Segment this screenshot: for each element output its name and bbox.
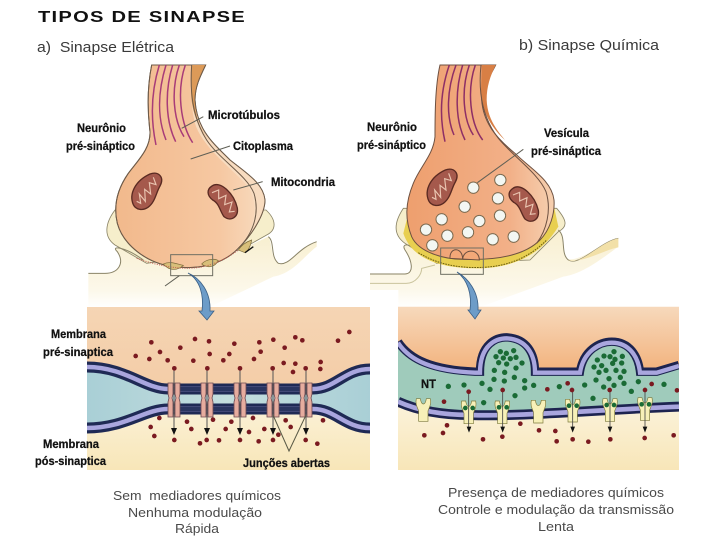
caption: chemical synapse: Presença de mediadores químicos xyxy=(448,485,665,500)
intercellular space xyxy=(87,372,370,422)
caption: electrical synapse xyxy=(113,488,282,536)
labels: electrical synapse: Membrana xyxy=(43,437,99,451)
title: TIPOS DE SINAPSE xyxy=(38,9,246,26)
yellow cleft band xyxy=(403,207,558,268)
labels: chemical synapse: pré-sináptico xyxy=(357,138,426,152)
panel: electrical synapse detail xyxy=(87,307,370,470)
caption: electrical synapse: Sem mediadores químicos xyxy=(113,488,282,503)
microtubules xyxy=(442,65,483,142)
zoom box xyxy=(441,248,483,274)
zoom box xyxy=(171,255,213,276)
ions xyxy=(133,330,352,446)
labels: electrical synapse: Junções abertas xyxy=(243,456,330,470)
presynaptic neuron xyxy=(407,65,554,259)
mitochondria xyxy=(427,169,457,205)
labels: electrical synapse: Mitocondria xyxy=(271,175,335,189)
panel: electrical synapse overview xyxy=(88,65,317,308)
arrow: chemical zoom xyxy=(457,272,481,319)
leader lines xyxy=(165,117,263,286)
flow arrows xyxy=(171,368,309,435)
labels: electrical synapse: pré-sinaptica xyxy=(43,345,113,359)
synaptic cleft xyxy=(398,342,679,410)
receptor arrows xyxy=(467,390,647,433)
panel: chemical synapse overview xyxy=(370,65,618,308)
arrow: electrical zoom xyxy=(188,273,214,320)
synaptic bumps xyxy=(450,250,479,260)
vesicles xyxy=(420,174,519,251)
labels: electrical synapse: Citoplasma xyxy=(233,139,293,153)
labels: chemical synapse: NT xyxy=(421,377,437,391)
labels: electrical synapse: Neurônio xyxy=(77,121,126,135)
labels: electrical synapse: Membrana xyxy=(51,327,106,341)
presynaptic membrane xyxy=(398,337,679,373)
receptors xyxy=(416,398,652,424)
panel: chemical synapse detail xyxy=(398,307,679,470)
microtubules xyxy=(152,65,193,145)
leader lines: junções abertas xyxy=(273,415,306,451)
labels: electrical synapse: Microtúbulos xyxy=(208,108,280,122)
labels: electrical synapse xyxy=(35,108,335,470)
labels: electrical synapse: pós-sinaptica xyxy=(35,454,106,468)
gap junction channels xyxy=(168,383,312,417)
labels: chemical synapse: Vesícula xyxy=(544,126,589,140)
postsynaptic membrane xyxy=(398,402,679,415)
caption: chemical synapse xyxy=(438,485,674,534)
ions xyxy=(422,381,679,444)
gap junction patches xyxy=(163,240,252,269)
labels: electrical synapse: pré-sináptico xyxy=(66,139,135,153)
caption: electrical synapse: Rápida xyxy=(175,521,220,536)
labels: chemical synapse xyxy=(357,120,601,391)
caption: chemical synapse: Controle e modulação da transmissão xyxy=(438,502,674,517)
caption: electrical synapse: Nenhuma modulação xyxy=(128,505,262,520)
postsynaptic side xyxy=(398,402,679,470)
presynaptic neuron xyxy=(116,65,265,268)
heading: sinapse química: b) Sinapse Química xyxy=(519,37,660,54)
heading: sinapse elétrica: a) Sinapse Elétrica xyxy=(37,39,175,56)
caption: chemical synapse: Lenta xyxy=(538,519,575,534)
mitochondria xyxy=(132,173,162,209)
labels: chemical synapse: Neurônio xyxy=(367,120,417,134)
labels: chemical synapse: pré-sináptica xyxy=(531,144,601,158)
neurotransmitters xyxy=(446,348,667,410)
leader line xyxy=(477,149,523,183)
membranes xyxy=(87,367,370,428)
